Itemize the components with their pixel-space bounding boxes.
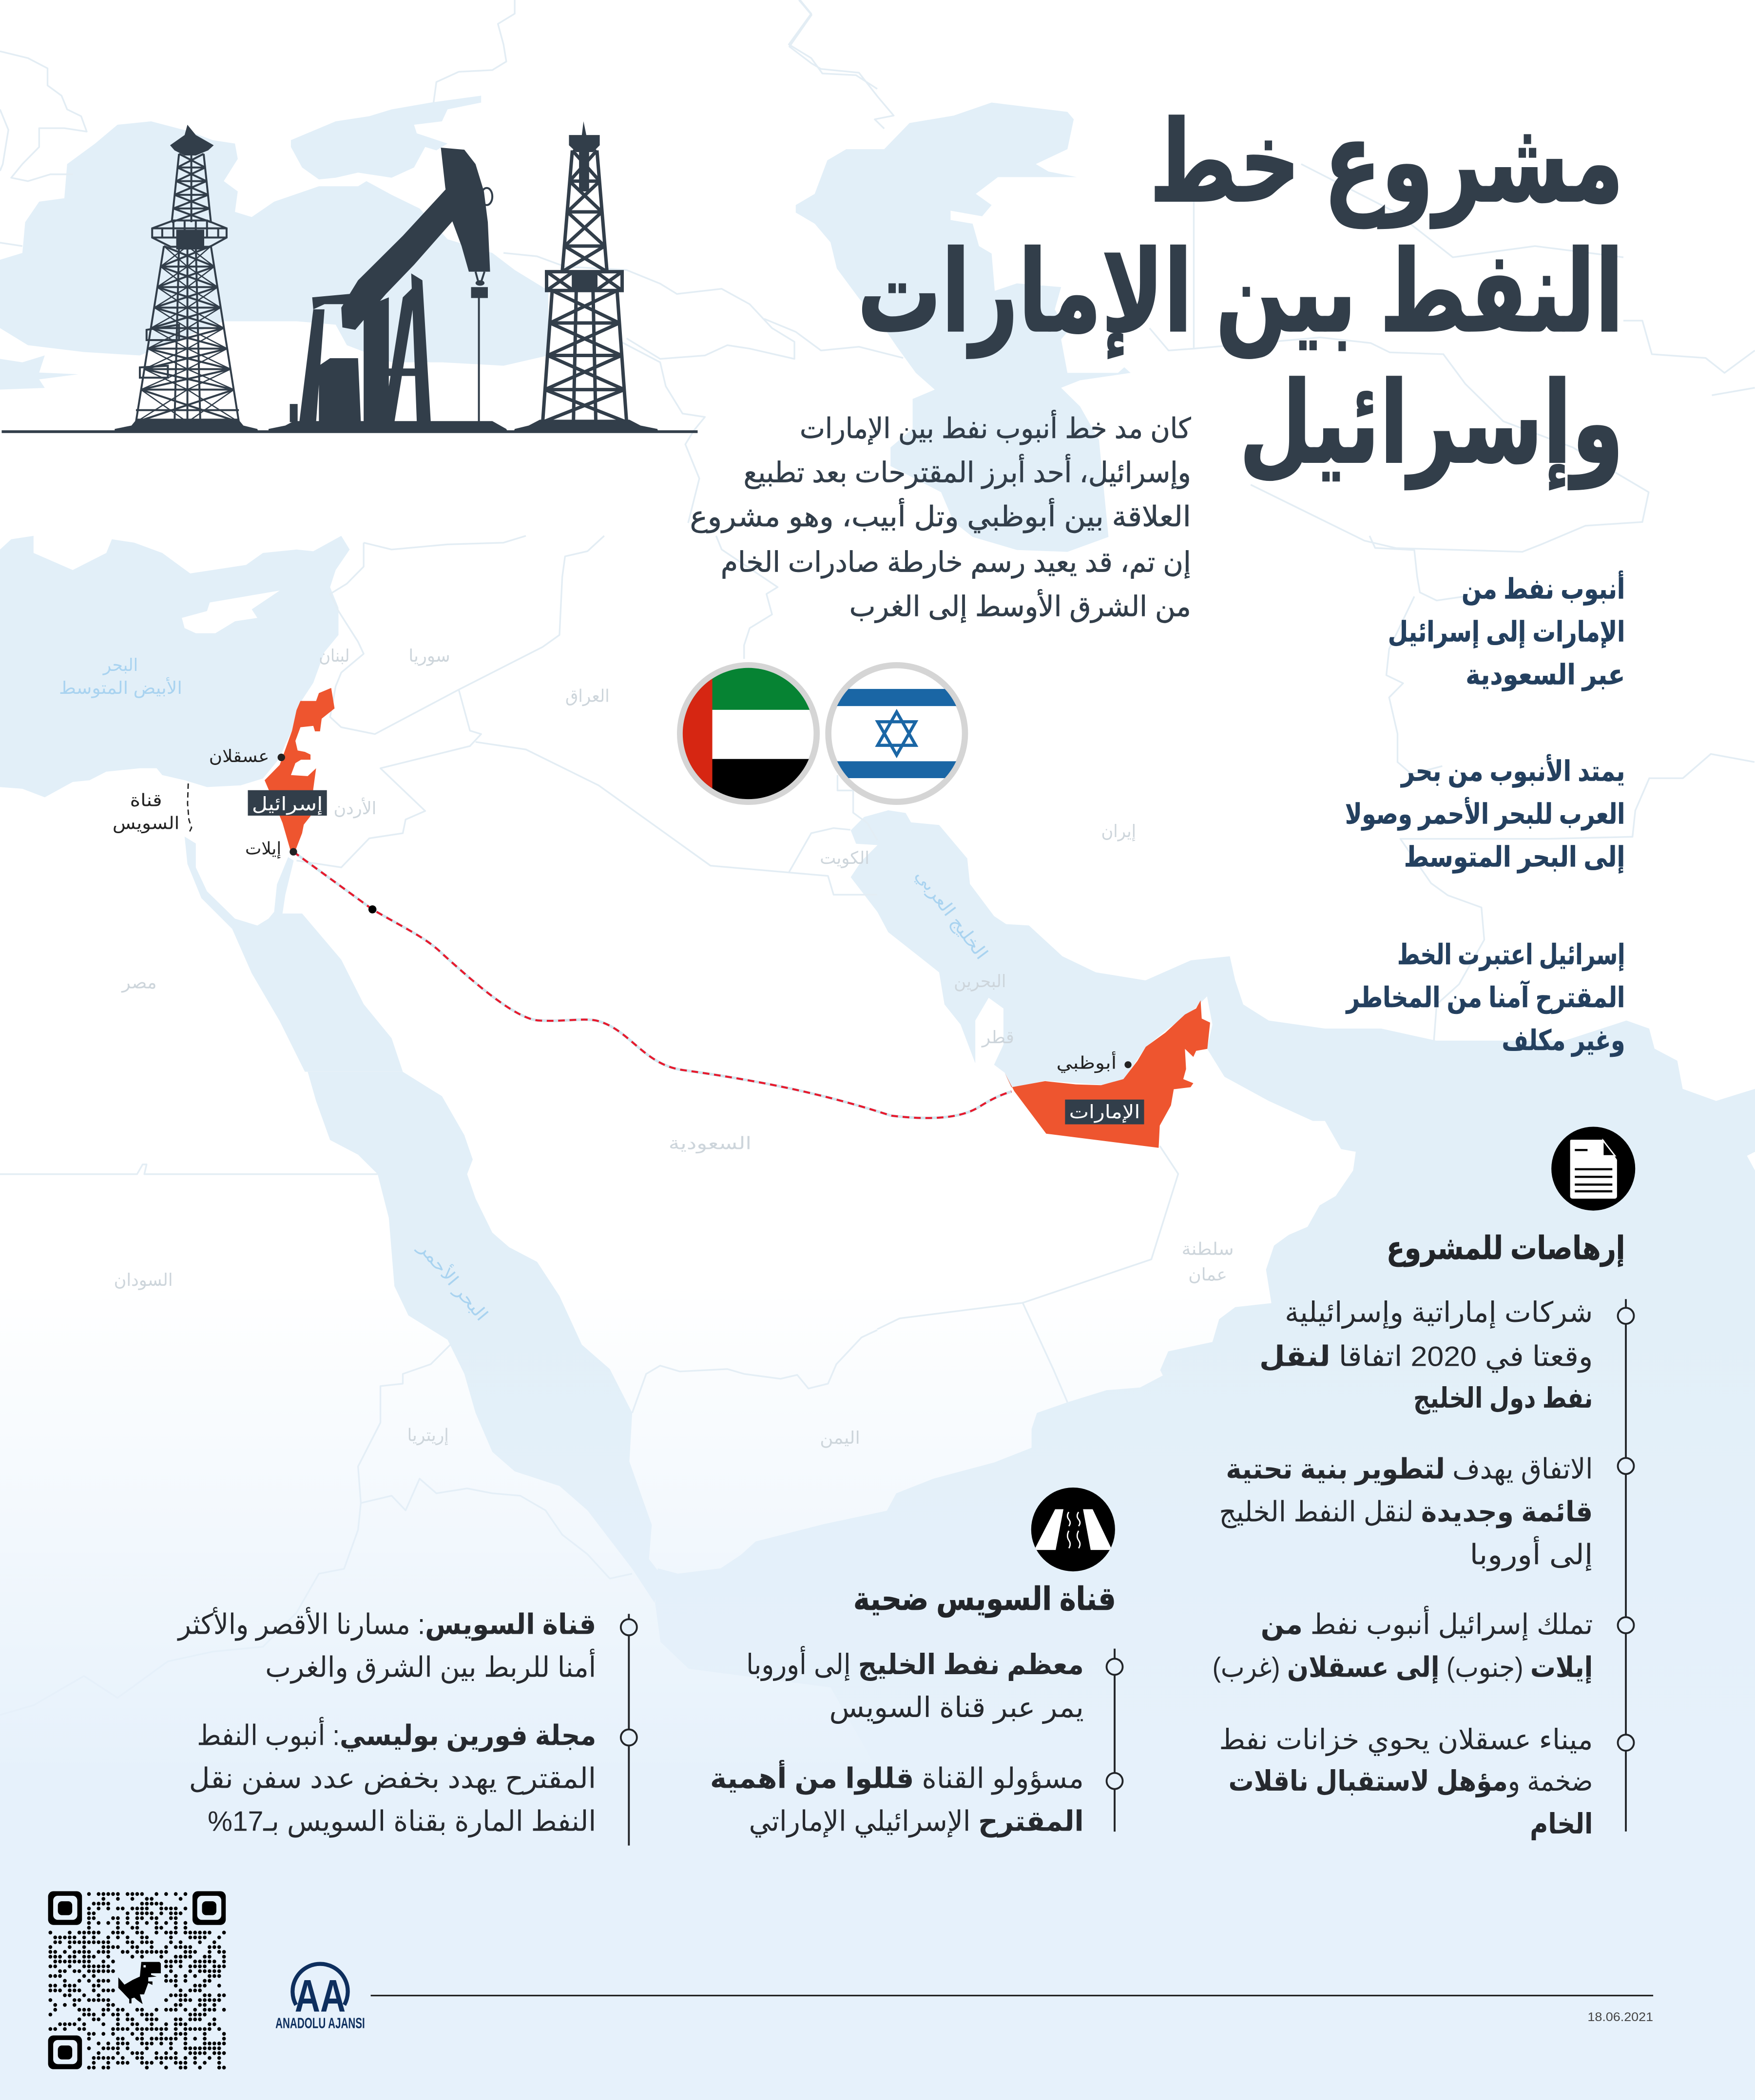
text items: مجلة فورين بوليسي: أنبوب النفط [197,1717,596,1753]
text items: نفط دول الخليج [1413,1383,1593,1415]
key points: يمتد الأنبوب من بحر [1400,754,1625,788]
panel: Suez Canal a victim [710,1488,1123,1838]
map: Israel highlight [113,688,334,859]
Israel shape [265,688,334,852]
title: وإسرائيل [1239,360,1624,490]
map labels: countries and seas: السودان [114,1270,173,1290]
text items: النفط المارة بقناة السويس بـ17‏% [208,1806,596,1838]
intro paragraph: وإسرائيل، أحد أبرز المقترحات بعد تطبيع [744,454,1191,490]
map labels: countries and seas: العراق [565,686,610,706]
city Eilat: إيلات [245,839,281,859]
pumpjack [269,148,508,432]
map labels: countries and seas: سلطنة [1181,1240,1234,1259]
text items: الاتفاق يهدف لتطوير بنية تحتية [1226,1454,1593,1486]
panel: project precursors [1213,1127,1635,1840]
data modules [50,1894,224,2067]
label Israel: إسرائيل [252,794,323,815]
map labels: countries and seas: اليمن [820,1428,860,1448]
bottom fade over map [0,1286,1755,2100]
key points: المقترح آمنا من المخاطر [1345,980,1625,1014]
map labels: countries and seas: عمان [1188,1265,1227,1284]
text items: المقترح يهدد بخفض عدد سفن نقل [189,1763,596,1795]
map labels: countries and seas: قطر [981,1028,1014,1048]
text items: أمنا للربط بين الشرق والغرب [265,1648,596,1684]
star of David [878,712,916,755]
intro paragraph: من الشرق الأوسط إلى الغرب [849,589,1191,623]
icon: canal road [1031,1488,1115,1571]
text items: معظم نفط الخليج إلى أوروبا [746,1646,1084,1681]
timeline [1107,1649,1123,1832]
text items: إيلات (جنوب) إلى عسقلان (غرب) [1213,1652,1593,1684]
map labels: countries and seas: البحر الأحمر [414,1237,493,1325]
map labels: countries and seas: السعودية [669,1133,752,1153]
key points: إسرائيل اعتبرت الخط [1397,939,1625,972]
text items: ميناء عسقلان يحوي خزانات نفط [1219,1724,1593,1756]
logo: Anadolu Agency [275,1964,365,2032]
map labels: countries and seas: سوريا [408,646,450,666]
text items: يمر عبر قناة السويس [829,1692,1084,1724]
icon: document [1551,1127,1635,1211]
sea: Black Sea and Azov [0,95,548,390]
oil derrick right [514,121,658,432]
map labels: countries and seas: إيران [1101,821,1136,841]
label UAE [1065,1100,1144,1125]
illustration: oil rigs and pumpjack [1,121,697,433]
map labels: countries and seas [59,646,1234,1448]
map labels: countries and seas: الأردن [333,797,376,819]
logo: Anadolu Agency: ANADOLU AJANSI [275,2016,365,2032]
map labels: countries and seas: الخليج العربي [911,866,992,963]
map: UAE highlight [1005,1000,1210,1148]
timeline [1618,1299,1634,1832]
intro paragraph: كان مد خط أنبوب نفط بين الإمارات [800,410,1191,445]
label Israel [248,790,327,816]
sea: Red Sea [308,1072,660,1603]
text items: ضخمة ومؤهل لاستقبال ناقلات [1229,1766,1593,1798]
key points: وغير مكلف [1502,1025,1625,1057]
oil derrick left [115,125,258,432]
key points [1345,571,1625,1057]
heading: إرهاصات للمشروع [1387,1230,1625,1267]
logo: Anadolu Agency: AA [295,1970,346,2022]
text items [177,1607,596,1838]
text items: مسؤولو القناة قللوا من أهمية [710,1760,1084,1795]
text items: تملك إسرائيل أنبوب نفط من [1261,1605,1593,1641]
map labels: countries and seas: إريتريا [407,1426,449,1446]
text items [1213,1297,1593,1840]
finder patterns [48,1891,226,2069]
map labels: countries and seas: الأبيض المتوسط [59,677,182,698]
text items: إلى أوروبا [1469,1536,1593,1572]
key points: العرب للبحر الأحمر وصولا [1345,797,1625,831]
QR code [48,1891,226,2069]
map labels: countries and seas: الكويت [820,848,869,868]
map labels: countries and seas: البحر [102,655,138,675]
key points: عبر السعودية [1466,660,1625,692]
heading: قناة السويس ضحية [853,1581,1116,1618]
sea: Persian Gulf and Arabian Sea [655,810,1755,2100]
UAE shape [1005,1000,1210,1148]
text items: قناة السويس: مسارنا الأقصر والأكثر [177,1607,596,1641]
key points: أنبوب نفط من [1462,571,1625,606]
Suez Canal label [113,783,192,833]
city Eilat [245,839,297,859]
intro paragraph [690,410,1191,623]
flag: UAE [677,662,820,805]
dinosaur [118,1962,161,2004]
key points: الإمارات إلى إسرائيل [1388,617,1625,649]
label UAE: الإمارات [1069,1102,1140,1123]
panel: Suez Canal and Foreign Policy quotes [177,1607,637,1846]
Suez Canal label: قناة [130,791,162,810]
sea: Caspian [796,102,1131,552]
footer line [371,1995,1653,1996]
map labels: countries and seas: لبنان [319,646,349,666]
text items: المقترح الإسرائيلي الإماراتي [749,1806,1084,1838]
city Ashkelon: عسقلان [209,746,270,766]
ground line [1,430,697,433]
sea: Mediterranean and Gulf of Suez [0,536,403,1072]
map labels: countries and seas: البحرين [954,972,1006,992]
text items: شركات إماراتية وإسرائيلية [1285,1297,1593,1329]
key points: إلى البحر المتوسط [1404,841,1625,874]
text items: وقعتا في 2020 اتفاقا لنقل [1259,1341,1593,1374]
intro paragraph: إن تم، قد يعيد رسم خارطة صادرات الخام [721,547,1191,579]
city Abu Dhabi [1056,1051,1132,1073]
Suez Canal label: السويس [113,813,179,833]
timeline [621,1614,637,1846]
map labels: countries and seas: مصر [121,973,157,993]
flag: Israel [824,665,971,802]
pipeline route [293,852,1011,1118]
intro paragraph: العلاقة بين أبوظبي وتل أبيب، وهو مشروع [690,498,1191,534]
city Abu Dhabi: أبوظبي [1056,1051,1117,1073]
title [857,99,1624,490]
text items [710,1646,1084,1838]
date: 18.06.2021 [1587,2011,1653,2024]
text items: الخام [1530,1809,1593,1840]
text items: قائمة وجديدة لنقل النفط الخليج [1219,1497,1593,1529]
